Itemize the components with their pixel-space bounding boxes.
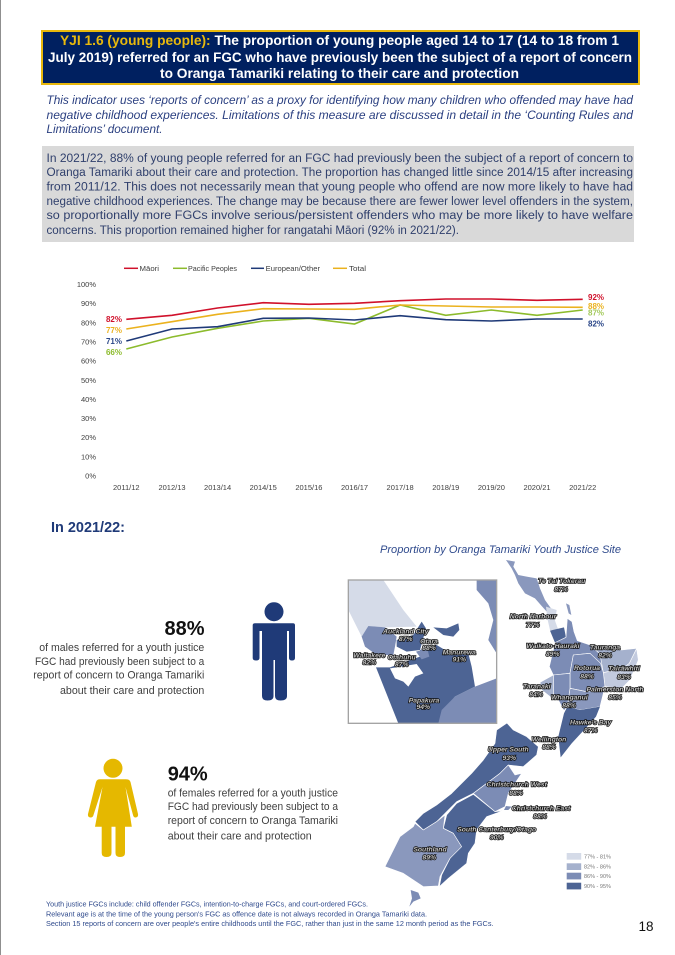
female statistic: of females referred for a youth justice xyxy=(168,788,338,800)
map labels: Christchurch East xyxy=(512,806,571,813)
end value labels: 87% xyxy=(588,308,604,318)
x axis labels: 2012/13 xyxy=(158,483,186,492)
x axis labels: 2020/21 xyxy=(523,483,551,492)
summary panel: concerns. This proportion remained higher for rangatahi Māori (92% in 2021/22). xyxy=(46,225,459,237)
map labels: 89% xyxy=(422,854,436,862)
male statistic: FGC had previously been subject to a xyxy=(35,656,205,668)
map labels: 90% xyxy=(490,835,504,842)
chart legend xyxy=(124,264,366,273)
summary panel xyxy=(42,146,634,242)
map labels: Tairāwhiti xyxy=(608,666,640,672)
series: Pacific Peoples xyxy=(126,305,583,349)
map labels xyxy=(353,578,644,862)
map labels: 85% xyxy=(608,694,622,702)
map labels: 88% xyxy=(542,744,556,751)
intro italic text: Limitations’ document. xyxy=(46,124,162,136)
chart legend: European/Other xyxy=(266,264,321,273)
x axis labels: 2017/18 xyxy=(387,483,414,492)
female statistic: FGC had previously been subject to a xyxy=(168,801,339,813)
x axis labels: 2021/22 xyxy=(569,483,596,492)
map labels: Upper South xyxy=(488,747,529,754)
y axis labels: 100% xyxy=(77,280,96,289)
map labels: 94% xyxy=(416,704,430,711)
series: Māori xyxy=(126,299,583,319)
map: North Island xyxy=(506,560,638,757)
map labels: Taranaki xyxy=(523,684,551,690)
footnotes xyxy=(46,900,494,928)
y axis labels: 70% xyxy=(81,338,96,346)
map labels: Auckland City xyxy=(382,628,430,636)
map labels: Palmerston North xyxy=(586,686,644,694)
map legend xyxy=(567,853,611,890)
y axis labels: 90% xyxy=(81,299,96,308)
map legend: 77% - 81% xyxy=(584,854,611,860)
intro italic text: negative childhood experiences. Limitations of this measure are discussed in detail in the ‘Counting Rules and xyxy=(46,110,634,122)
map labels: Otahuhu xyxy=(388,655,417,662)
end value labels: 88% xyxy=(588,302,604,311)
y axis labels: 50% xyxy=(81,376,96,385)
title banner: July 2019) referred for an FGC who have previously been the subject of a report of concern xyxy=(48,50,632,65)
map labels: North Harbour xyxy=(510,614,557,620)
map labels: Rotorua xyxy=(574,665,600,672)
male statistic: report of concern to Oranga Tamariki xyxy=(33,670,204,682)
end value labels: 92% xyxy=(588,293,604,302)
map labels: Te Tai Tokerau xyxy=(538,578,586,585)
map labels: 88% xyxy=(580,674,594,680)
female statistic: about their care and protection xyxy=(168,831,312,843)
series: European/Other xyxy=(126,316,583,341)
map labels: Wellington xyxy=(532,736,566,744)
map labels: 88% xyxy=(533,814,547,820)
title banner: YJI 1.6 (young people): The proportion of young people aged 14 to 17 (14 to 18 from 1 xyxy=(60,33,619,48)
y axis labels: 0% xyxy=(85,472,96,480)
male statistic xyxy=(33,618,205,697)
x axis labels xyxy=(113,483,596,492)
start value labels: 82% xyxy=(106,315,122,324)
map labels: Christchurch West xyxy=(487,782,548,789)
map labels: 88% xyxy=(509,790,523,797)
map labels: 88% xyxy=(562,702,576,710)
map labels: 82% xyxy=(362,660,376,667)
map labels: Manurewa xyxy=(443,650,476,657)
map labels: 89% xyxy=(546,651,560,658)
start value labels xyxy=(106,315,122,357)
chart legend: Pacific Peoples xyxy=(188,264,237,273)
map labels: 87% xyxy=(584,728,598,734)
map labels: 93% xyxy=(502,755,516,762)
x axis labels: 2018/19 xyxy=(432,483,459,492)
line chart xyxy=(77,264,604,492)
map labels: Waikato-Hauraki xyxy=(526,643,580,650)
y axis labels: 40% xyxy=(81,395,96,404)
chart legend: Total xyxy=(349,264,366,273)
icon: male figure xyxy=(253,602,295,700)
male statistic: of males referred for a youth justice xyxy=(39,642,204,654)
summary panel: In 2021/22, 88% of young people referred for an FGC had previously been the subject of a report of concern to xyxy=(46,153,633,165)
end value labels xyxy=(588,293,604,328)
footnotes: Youth justice FGCs include: child offender FGCs, intention-to-charge FGCs, and court-ordered FGCs. xyxy=(46,900,368,908)
map: South Island xyxy=(385,723,538,907)
y axis labels: 10% xyxy=(81,452,96,462)
map labels: Papakura xyxy=(409,698,440,704)
series: Total xyxy=(126,305,583,329)
female statistic xyxy=(168,764,339,843)
map labels: 87% xyxy=(554,586,568,594)
map labels: Hawke's Bay xyxy=(570,720,613,726)
map labels: 82% xyxy=(598,652,612,660)
map title: Proportion by Oranga Tamariki Youth Justice Site xyxy=(380,544,621,556)
summary panel: negative childhood experiences. The change may be because there are fewer lower level offenders in the system, xyxy=(46,196,633,208)
map labels: 87% xyxy=(399,636,413,643)
x axis labels: 2019/20 xyxy=(478,483,505,492)
start value labels: 66% xyxy=(106,348,122,357)
x axis labels: 2011/12 xyxy=(113,483,140,492)
map labels: 77% xyxy=(526,622,540,629)
map labels: South Canterbury/Otago xyxy=(457,827,536,834)
footnotes: Section 15 reports of concern are over people's entire childhoods until the FGC, rather than just in the same 12 month period as the FGCs. xyxy=(46,919,494,928)
male statistic: 88% xyxy=(164,618,205,640)
map labels: 84% xyxy=(529,692,543,698)
x axis labels: 2015/16 xyxy=(295,483,322,492)
chart legend: Māori xyxy=(140,264,159,273)
map legend: 82% - 86% xyxy=(584,865,611,871)
summary panel: so proportionally more FGCs involve serious/persistent offenders who may be more likely to have welfare xyxy=(46,210,633,222)
y axis labels: 30% xyxy=(81,414,96,423)
map labels: Southland xyxy=(413,846,447,854)
map labels: 91% xyxy=(452,657,466,664)
title banner: to Oranga Tamariki relating to their care and protection xyxy=(160,66,519,81)
summary panel: Oranga Tamariki about their care and protection. The proportion has changed little since 2014/15 after increasing xyxy=(46,167,633,179)
map legend: 90% - 95% xyxy=(584,884,611,890)
map: Auckland inset xyxy=(348,580,497,723)
map legend: 86% - 90% xyxy=(584,874,611,880)
x axis labels: 2014/15 xyxy=(250,483,277,492)
x axis labels: 2013/14 xyxy=(204,483,231,492)
female statistic: 94% xyxy=(168,764,208,786)
start value labels: 71% xyxy=(106,337,122,346)
intro italic text: This indicator uses ‘reports of concern’ as a proxy for identifying how many children who offended may have had xyxy=(46,95,634,107)
intro italic text xyxy=(46,95,634,136)
male statistic: about their care and protection xyxy=(60,685,204,697)
map labels: Tauranga xyxy=(590,644,620,652)
map labels: Whanganui xyxy=(551,695,588,702)
y axis labels: 20% xyxy=(81,433,96,442)
summary panel: from 2011/12. This does not necessarily mean that young people who offend are now more likely to have had xyxy=(46,182,633,194)
map labels: 88% xyxy=(422,645,436,652)
map labels: Waitakere xyxy=(353,652,386,660)
y axis labels xyxy=(77,280,96,480)
x axis labels: 2016/17 xyxy=(341,483,368,492)
map labels: 87% xyxy=(395,662,409,669)
map labels: Otara xyxy=(420,638,438,646)
title banner xyxy=(42,31,639,84)
footnotes: Relevant age is at the time of the young person's FGC as offence date is not always recorded in Oranga Tamariki data. xyxy=(46,910,427,918)
y axis labels: 80% xyxy=(81,318,96,328)
y axis labels: 60% xyxy=(81,356,96,366)
icon: female figure xyxy=(88,759,138,857)
start value labels: 77% xyxy=(106,326,122,335)
female statistic: report of concern to Oranga Tamariki xyxy=(168,815,338,827)
end value labels: 82% xyxy=(588,320,604,328)
page number: 18 xyxy=(638,919,654,934)
map labels: 83% xyxy=(617,674,631,681)
section heading: In 2021/22: xyxy=(51,520,125,536)
